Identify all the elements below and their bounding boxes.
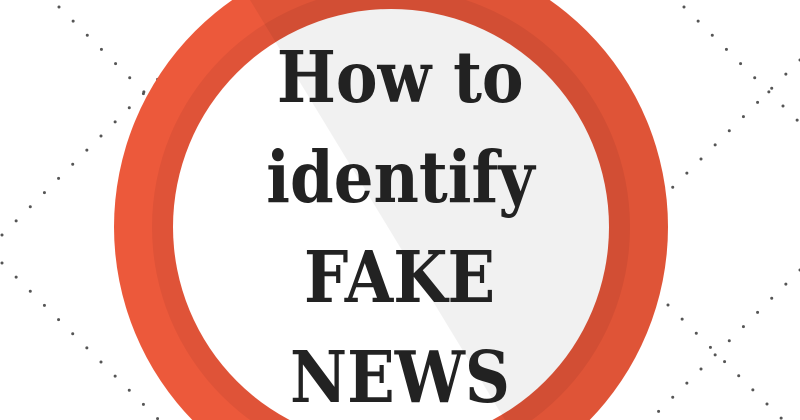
title text: FAKE [304, 235, 496, 319]
title text: identify [266, 135, 534, 219]
title text: How to [277, 35, 523, 119]
title text: NEWS [290, 335, 510, 419]
red ring sign [114, 0, 668, 420]
